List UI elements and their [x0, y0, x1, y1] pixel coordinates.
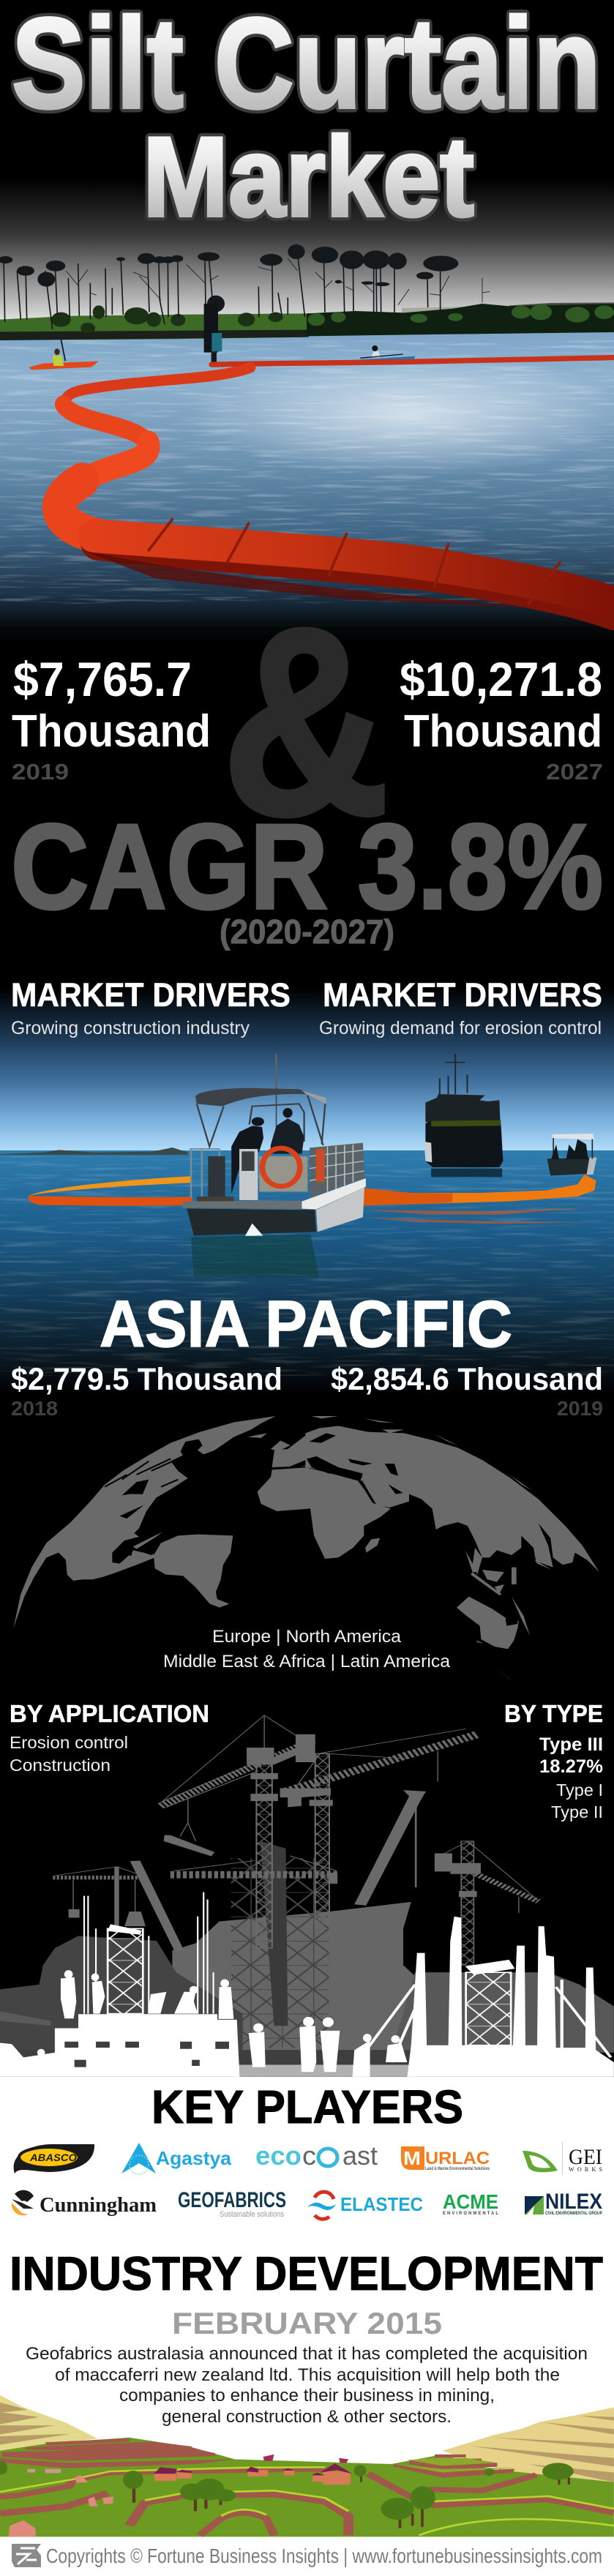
stat: Asia Pacific 2018: 2018	[11, 1397, 58, 1420]
other regions	[163, 1627, 451, 1671]
logo: ACME: ACME	[443, 2190, 498, 2213]
logo: Cunningham	[12, 2190, 157, 2217]
application list: Construction	[10, 1756, 111, 1775]
stat: 2019: $7,765.7	[13, 652, 192, 706]
crane: tall left	[160, 1715, 315, 1948]
world map globe	[13, 1416, 599, 1682]
logo: ecocoast: c	[302, 2141, 316, 2171]
title: Market	[143, 113, 474, 240]
small boat	[547, 1134, 597, 1176]
workers	[23, 1970, 407, 2077]
market driver: right: MARKET DRIVERS	[323, 976, 602, 1014]
other regions: Europe | North America	[212, 1627, 402, 1647]
market driver: right	[319, 976, 602, 1038]
stat: 2019: 2019	[12, 759, 69, 785]
stat: 2027: $10,271.8	[400, 652, 602, 706]
huts	[27, 2463, 352, 2485]
development description: companies to enhance their business in mining,	[119, 2386, 495, 2405]
other regions: Middle East & Africa | Latin America	[163, 1652, 451, 1671]
type list: Type II	[551, 1802, 603, 1821]
logo: GEI Works: WORKS	[569, 2166, 602, 2173]
application list: Erosion control	[10, 1733, 128, 1752]
type list: Type III	[539, 1734, 603, 1755]
type list: BY TYPE	[504, 1700, 603, 1727]
channel marker post	[204, 304, 222, 362]
logo: Agastya: Agastya	[156, 2147, 232, 2169]
logo: GEI Works: GEI	[569, 2145, 602, 2169]
logo: ecocoast: eco	[255, 2141, 302, 2171]
market driver: left: MARKET DRIVERS	[11, 976, 291, 1014]
logo: Geofabrics: GEOFABRICS	[178, 2188, 286, 2212]
logo: Agastya	[121, 2143, 232, 2174]
logo: Elastec: ELASTEC	[340, 2193, 423, 2215]
development description: general construction & other sectors.	[162, 2407, 452, 2427]
background buildings	[0, 1841, 614, 2077]
logo: Nilex: NILEX	[545, 2190, 602, 2214]
heading: industry development: INDUSTRY DEVELOPMENT	[10, 2247, 603, 2300]
market driver: right: Growing demand for erosion control	[319, 1018, 602, 1038]
logo: Murlac: URLAC	[425, 2149, 490, 2168]
right hill	[443, 2408, 614, 2485]
logo: ecocoast	[255, 2141, 378, 2171]
market driver: left: Growing construction industry	[11, 1018, 250, 1038]
rice terrace landscape	[0, 2395, 614, 2536]
type list	[504, 1700, 603, 1821]
far kayak	[353, 345, 415, 361]
heading: key players: KEY PLAYERS	[151, 2081, 463, 2133]
rocks and distant trees	[9, 2455, 348, 2536]
logo: ecocoast: ast	[342, 2141, 378, 2171]
terrace walls	[0, 2467, 614, 2535]
crane: small left and boom	[53, 1860, 184, 1950]
hero photo: silt curtain on lake	[0, 176, 614, 645]
photo: boats deploying boom	[0, 988, 614, 1396]
right terraces	[394, 2455, 515, 2478]
ground	[0, 2438, 614, 2536]
logo: Abasco	[14, 2144, 94, 2174]
logo: Elastec	[307, 2192, 423, 2219]
development description	[26, 2344, 588, 2427]
development description: of maccaferri new zealand ltd. This acquisition will help both the	[55, 2365, 560, 2385]
construction silhouette scene	[0, 1715, 614, 2077]
logo: Cunningham: Cunningham	[40, 2194, 157, 2217]
tree line: right	[307, 247, 614, 361]
crane: centre jib	[171, 1856, 339, 1884]
market driver: left	[11, 976, 291, 1038]
logo: Geofabrics	[178, 2188, 286, 2219]
stat: 2019: Thousand	[12, 706, 211, 757]
large vessel	[424, 1054, 503, 1177]
CAGR: (2020-2027)	[220, 913, 394, 951]
type list: 18.27%	[539, 1756, 603, 1777]
white lower section	[0, 2077, 614, 2576]
heading: Asia Pacific: ASIA PACIFIC	[100, 1288, 512, 1361]
left terraces	[0, 2438, 235, 2468]
logo: Nilex	[525, 2190, 602, 2216]
date: FEBRUARY 2015	[172, 2306, 442, 2340]
stat: 2027: 2027	[546, 759, 603, 785]
left boom loop	[28, 1176, 192, 1206]
distant island	[0, 1147, 188, 1155]
stat: Asia Pacific 2018: $2,779.5 Thousand	[11, 1362, 282, 1397]
logo: Murlac: M	[403, 2147, 421, 2169]
stat: 2027	[400, 652, 603, 785]
logo: Murlac	[401, 2146, 490, 2171]
logo: Murlac: Land & Marine Environmental Solutions	[425, 2167, 490, 2171]
logo: GEI Works	[523, 2142, 602, 2175]
application list	[10, 1700, 209, 1775]
tree line: left	[0, 244, 309, 370]
logo: ACME: ENVIRONMENTAL	[443, 2212, 498, 2216]
application list: BY APPLICATION	[10, 1700, 209, 1727]
logo: Geofabrics: Sustainable solutions	[220, 2210, 284, 2219]
reflection	[82, 550, 528, 607]
left hill	[0, 2395, 98, 2453]
white scaffolding and workers	[0, 1892, 614, 2077]
footer logo	[12, 2544, 41, 2567]
kayak with paddler	[29, 340, 99, 370]
stat: Asia Pacific 2018	[11, 1362, 282, 1420]
logo: Nilex: CIVIL ENVIRONMENTAL GROUP	[545, 2212, 602, 2216]
crane: far right	[435, 1841, 539, 1965]
stat: Asia Pacific 2019: 2019	[557, 1397, 603, 1420]
stat: Asia Pacific 2019: $2,854.6 Thousand	[331, 1362, 603, 1397]
logo: Abasco: ABASCO	[29, 2152, 77, 2163]
stat: 2019	[12, 652, 211, 785]
work boat	[182, 1054, 366, 1277]
crane: tall right	[280, 1729, 478, 1924]
orange silt curtain boom	[59, 358, 614, 612]
ampersand: &	[222, 573, 390, 871]
mobile crane	[354, 1790, 426, 1906]
trees	[0, 2461, 574, 2528]
stat: Asia Pacific 2019	[331, 1362, 603, 1420]
type list: Type I	[556, 1781, 603, 1800]
title	[12, 0, 601, 240]
right boom	[363, 1175, 596, 1224]
right scaffold mass	[407, 1917, 614, 2077]
title: Market	[143, 113, 474, 240]
development description: Geofabrics australasia announced that it has completed the acquisition	[26, 2344, 588, 2364]
